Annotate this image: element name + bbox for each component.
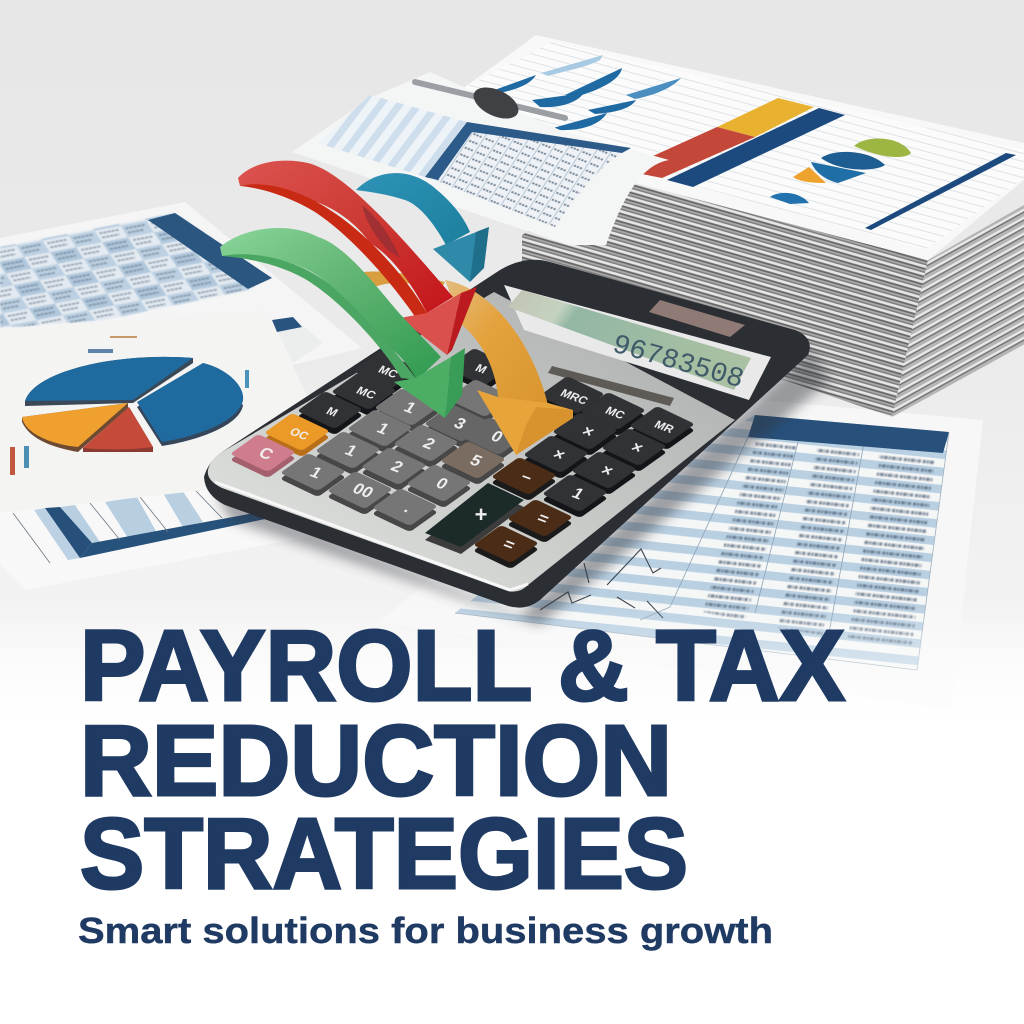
- keypad: 1: [306, 463, 326, 482]
- keypad: M: [324, 405, 340, 419]
- panel: pie chart sheet: [0, 310, 323, 513]
- keypad: 2: [419, 434, 439, 453]
- bottom fade: [0, 600, 1024, 740]
- calculator: [204, 260, 810, 608]
- keypad: .: [401, 499, 416, 516]
- stack front edges: [522, 177, 928, 417]
- keypad: M: [473, 362, 489, 376]
- subtitle: Smart solutions for business growth: [78, 910, 773, 951]
- keypad: OC: [287, 426, 311, 443]
- spreadsheet table: [455, 415, 950, 670]
- plus key: [425, 483, 524, 554]
- keypad: 5: [466, 451, 486, 470]
- keypad: MC: [603, 405, 628, 422]
- arrow: blue: [356, 173, 489, 282]
- keypad: =: [499, 535, 519, 554]
- curled front sheet: [292, 72, 669, 245]
- navy rule: [865, 153, 1016, 230]
- pie chart: [22, 357, 243, 452]
- keypad: 00: [349, 479, 377, 502]
- title: PAYROLL & TAX: [80, 610, 845, 722]
- keypad: MC: [354, 385, 379, 402]
- pie labels: [10, 336, 249, 475]
- title: STRATEGIES: [80, 798, 688, 910]
- LCD screen: [508, 290, 751, 390]
- calculator shadow: [215, 350, 830, 625]
- keypad: MRC: [558, 387, 591, 407]
- keypad: 0: [432, 474, 452, 493]
- bar: navy: [667, 108, 845, 187]
- title: [80, 610, 845, 910]
- keypad: =: [533, 509, 553, 528]
- keypad: C: [255, 444, 277, 463]
- arrow: red: [238, 161, 477, 355]
- keypad: MR: [652, 419, 677, 436]
- top report sheet: [420, 35, 1024, 260]
- solar panel: [649, 300, 745, 337]
- arrow: yellow: [364, 272, 573, 455]
- bar: yellow: [717, 98, 814, 137]
- arrow: green: [220, 228, 465, 418]
- keypad: –: [517, 467, 537, 486]
- pie fragments: [770, 138, 911, 204]
- keypad: ×: [597, 461, 617, 480]
- keypad: 1: [568, 484, 588, 503]
- keypad: 1: [400, 398, 420, 417]
- panel: paper stack: [292, 35, 1024, 417]
- small table fragment: [272, 317, 323, 363]
- panel: left spreadsheet sheet: [0, 202, 362, 365]
- LCD digits: 96783508: [608, 330, 747, 396]
- keypad: [230, 348, 695, 569]
- stack side edges: [892, 205, 1024, 417]
- keypad: 1: [341, 441, 361, 460]
- keypad: ×: [549, 445, 569, 464]
- line chart: [540, 549, 663, 618]
- title: REDUCTION: [80, 705, 672, 817]
- metal faceplate: [208, 292, 735, 592]
- display bezel: [504, 285, 771, 400]
- brush bars: [489, 55, 681, 130]
- keypad: 1: [373, 419, 393, 438]
- bar: red: [622, 127, 755, 178]
- keypad: MC: [376, 364, 401, 381]
- keypad: 2: [387, 457, 407, 476]
- keypad: ×: [578, 422, 598, 441]
- keypad: 0: [487, 427, 507, 446]
- calculator body: [204, 260, 810, 608]
- keypad: ×: [627, 438, 647, 457]
- pen: [415, 81, 565, 125]
- keypad: 3: [450, 414, 470, 433]
- panel: payroll table sheet: [455, 404, 983, 670]
- plus key: +: [475, 502, 487, 527]
- indicator strip: [548, 366, 674, 406]
- panel: bottom-left table sheet: [0, 470, 307, 590]
